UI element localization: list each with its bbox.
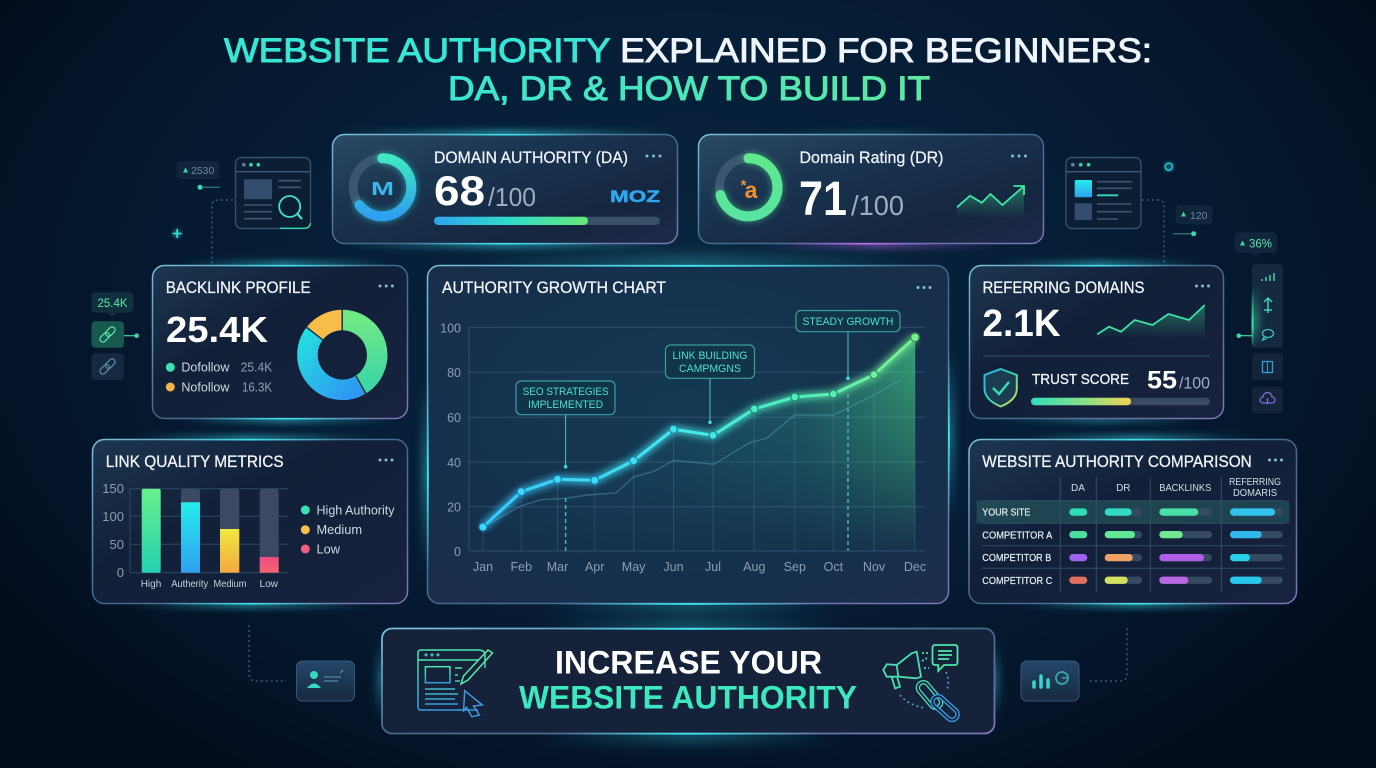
panel: authority growth chart xyxy=(425,262,951,606)
callout: SEO strategies implemented: IMPLEMENTED xyxy=(528,399,603,411)
icon: DR ring gauge xyxy=(720,158,778,216)
trust score value: 55 xyxy=(1147,366,1177,394)
bar chart: 150 xyxy=(102,481,124,496)
icon: DA ring gauge xyxy=(353,158,411,216)
legend xyxy=(166,360,273,394)
DA max: /100 xyxy=(488,182,536,212)
right floating badge: 120: 120 xyxy=(1190,210,1208,222)
legend: Nofollow xyxy=(181,380,230,394)
comparison table: DA xyxy=(1071,483,1085,494)
menu dots xyxy=(646,154,662,158)
line chart: Mar xyxy=(547,560,568,574)
legend xyxy=(301,502,395,556)
left floating badge: 2530: 2530 xyxy=(191,165,215,177)
line chart xyxy=(440,322,926,574)
icon: active link tile xyxy=(92,321,139,348)
left floating badge: 2530 xyxy=(176,161,220,190)
callout: link building campaigns: LINK BUILDING xyxy=(672,350,748,362)
panel: backlink profile xyxy=(152,263,408,421)
MOZ logo: MOZ xyxy=(610,187,660,206)
menu dots xyxy=(1011,154,1027,158)
right tile group xyxy=(1234,232,1283,413)
badge: 36%: 36% xyxy=(1249,238,1272,250)
bar chart: High xyxy=(141,579,161,590)
legend: Medium xyxy=(316,522,362,537)
bar chart: 50 xyxy=(110,537,124,552)
icon: link tile xyxy=(92,353,124,380)
callout: steady growth xyxy=(796,310,900,551)
title: WEBSITE AUTHORITY EXPLAINED FOR BEGINNERS: xyxy=(224,32,1152,70)
title xyxy=(224,32,1152,108)
callout: SEO strategies implemented: SEO STRATEGIES xyxy=(523,386,609,398)
comparison table: BACKLINKS xyxy=(1159,483,1212,494)
menu dots xyxy=(378,284,394,288)
icon tile: bars, arrows, chat xyxy=(1236,264,1283,348)
heading: REFERRING DOMAINS xyxy=(982,278,1144,297)
donut chart xyxy=(306,309,377,394)
line chart: Apr xyxy=(585,560,604,574)
line chart: Jul xyxy=(705,560,721,574)
right footer tile: chart xyxy=(1021,661,1079,701)
value: 25.4K xyxy=(166,309,268,350)
comparison table xyxy=(977,477,1289,592)
line chart: 60 xyxy=(447,411,461,425)
icon: right browser window xyxy=(1066,158,1141,228)
icon: browser with pencil and cursor xyxy=(418,650,492,717)
trust score max: /100 xyxy=(1179,374,1210,392)
DR trend sparkline xyxy=(957,186,1024,218)
trust score bar xyxy=(1031,398,1210,405)
line chart: Dec xyxy=(904,560,926,574)
line chart: 80 xyxy=(447,366,461,380)
legend: Low xyxy=(316,542,341,556)
comparison table: DOMARIS xyxy=(1233,488,1277,499)
DR score: 71 xyxy=(799,173,847,226)
right floating badge: 120 xyxy=(1173,205,1213,236)
heading: LINK QUALITY METRICS xyxy=(106,452,284,471)
comparison table: COMPETITOR A xyxy=(982,530,1053,541)
badge: 36% xyxy=(1234,232,1277,257)
value: 2.1K xyxy=(982,303,1061,345)
callout: link building campaigns: CAMPMGNS xyxy=(679,363,741,375)
menu dots xyxy=(378,458,394,462)
left tile group: links xyxy=(92,292,139,380)
callout: SEO strategies implemented xyxy=(516,381,615,551)
CTA text line 2: WEBSITE AUTHORITY xyxy=(519,680,857,716)
icon: browser with magnifier xyxy=(236,158,310,228)
icon: DA ring gauge: M xyxy=(371,179,394,199)
legend: 16.3K xyxy=(242,380,273,394)
line chart: 0 xyxy=(454,545,461,559)
line chart: Jun xyxy=(663,560,684,574)
heading: AUTHORITY GROWTH CHART xyxy=(442,278,666,297)
comparison table: COMPETITOR C xyxy=(982,576,1052,587)
line chart: 40 xyxy=(447,456,461,470)
line chart: May xyxy=(622,560,646,574)
connector lines xyxy=(212,200,1164,681)
icon: DR ring gauge: * xyxy=(741,177,747,194)
line chart: Sep xyxy=(784,560,806,574)
bar chart: Medium xyxy=(214,579,246,590)
panel: domain authority xyxy=(332,132,678,246)
line chart: Nov xyxy=(863,560,886,574)
bar chart: 100 xyxy=(102,509,124,524)
icon: DR ring gauge: a xyxy=(745,177,758,203)
line chart: Aug xyxy=(743,560,765,574)
legend: 25.4K xyxy=(241,360,273,374)
bar chart: Autherity xyxy=(171,579,208,590)
sparkline xyxy=(1097,305,1205,338)
panel: domain rating xyxy=(698,133,1044,246)
legend: High Authority xyxy=(316,502,395,518)
menu dots xyxy=(1195,284,1210,288)
DR max: /100 xyxy=(851,190,904,221)
line chart: Oct xyxy=(824,560,844,574)
line chart: 100 xyxy=(440,322,461,336)
panel: website authority comparison xyxy=(969,437,1296,606)
legend: Dofollow xyxy=(181,360,230,374)
DA progress bar xyxy=(434,217,660,225)
comparison table: YOUR SITE xyxy=(982,508,1031,518)
CTA text line 1: INCREASE YOUR xyxy=(555,644,822,680)
bar chart: Low xyxy=(260,579,279,590)
title: DA, DR & HOW TO BUILD IT xyxy=(448,70,930,108)
heading: domain authority: DOMAIN AUTHORITY (DA) xyxy=(434,148,628,167)
comparison table: COMPETITOR B xyxy=(982,553,1052,564)
panel: link quality metrics xyxy=(92,437,408,606)
line chart: Jan xyxy=(473,560,493,574)
panel: referring domains xyxy=(970,263,1224,421)
left footer tile: person xyxy=(296,661,354,701)
heading: WEBSITE AUTHORITY COMPARISON xyxy=(982,452,1252,471)
callout: steady growth: STEADY GROWTH xyxy=(802,316,894,328)
call to action banner xyxy=(380,626,996,737)
heading: domain rating: Domain Rating (DR) xyxy=(800,148,944,167)
icon: megaphone, chat and chain xyxy=(883,645,960,722)
line chart: 20 xyxy=(447,500,461,514)
icon: ring sparkle xyxy=(1165,163,1172,170)
line chart: Feb xyxy=(511,560,532,574)
comparison table: DR xyxy=(1116,483,1131,494)
trust score label: TRUST SCORE xyxy=(1032,372,1129,388)
comparison table: REFERRING xyxy=(1229,477,1281,488)
badge: 25.4K: 25.4K xyxy=(97,298,128,310)
icon tile: cloud xyxy=(1252,387,1283,413)
bar chart xyxy=(102,481,288,590)
menu dots xyxy=(1268,458,1283,462)
icon: shield xyxy=(984,369,1017,406)
callout: link building campaigns xyxy=(666,345,754,424)
bar chart: 0 xyxy=(117,565,124,580)
menu dots xyxy=(916,286,932,289)
icon tile: layout xyxy=(1252,353,1283,380)
icon: plus sparkle xyxy=(173,229,182,238)
DA score: 68 xyxy=(434,167,485,214)
heading: BACKLINK PROFILE xyxy=(166,278,311,297)
